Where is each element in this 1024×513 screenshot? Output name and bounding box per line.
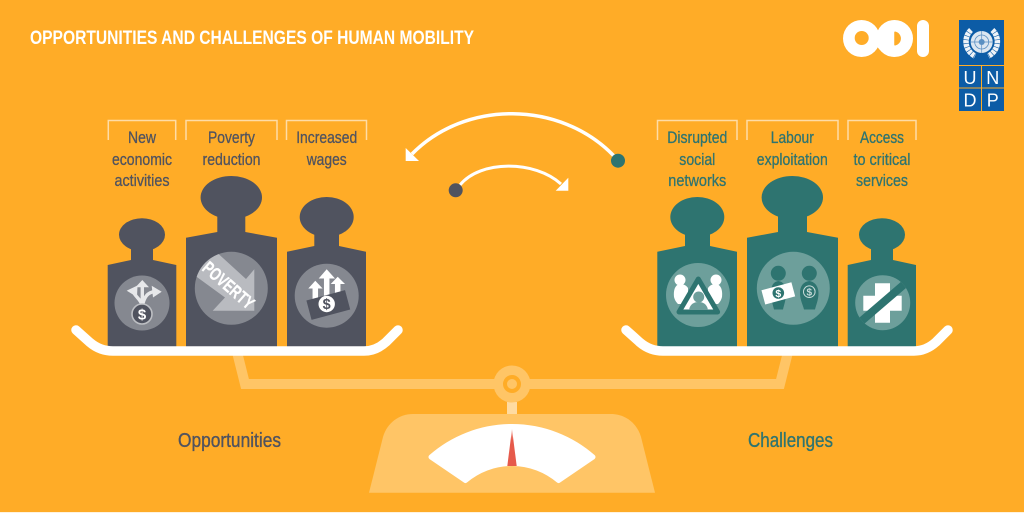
logo: UNDP: N [986, 68, 999, 88]
logo: UNDP: U [964, 68, 976, 88]
bracket and label: disrupted social networks: Disrupted [667, 128, 727, 147]
bracket and label: new economic activities: New [128, 128, 157, 147]
icon: diverging arrows and coin: $ [138, 306, 147, 324]
arrow: challenges to opportunities [406, 114, 625, 168]
bracket and label: new economic activities: activities [114, 171, 170, 190]
bracket and label: access to critical services: Access [860, 128, 904, 147]
pan: left [76, 330, 398, 351]
logo: ODI [843, 20, 929, 57]
icon: crossed-out medical cross [860, 282, 906, 324]
icon: rising arrows and banknote [306, 269, 350, 320]
bracket and label: increased wages: Increased [296, 128, 357, 147]
logo: UNDP [959, 20, 1004, 111]
bracket and label: access to critical services [848, 120, 916, 190]
needle [507, 429, 517, 466]
bracket and label: increased wages [286, 120, 366, 169]
weight: access to critical services [848, 218, 916, 347]
panel: challenges [626, 120, 948, 452]
title: OPPORTUNITIES AND CHALLENGES OF HUMAN MOBILITY [30, 27, 474, 49]
weight: labour exploitation [747, 176, 838, 347]
bracket and label: disrupted social networks: networks [668, 171, 726, 190]
bracket and label: disrupted social networks [658, 120, 737, 190]
icon: poverty down arrow: POVERTY [198, 258, 258, 313]
icon: poverty down arrow [196, 254, 256, 311]
weight: increased wages [287, 197, 366, 347]
gauge dial [431, 426, 593, 480]
icon: workers and banknote: $ [775, 288, 781, 300]
bracket and label: new economic activities [108, 120, 176, 190]
icon: people and warning triangle [674, 274, 722, 312]
label: challenges: Challenges [748, 430, 833, 452]
bracket and label: labour exploitation [747, 120, 838, 169]
logo: UNDP: D [964, 90, 976, 110]
bracket and label: disrupted social networks: social [679, 150, 715, 169]
bracket and label: poverty reduction: Poverty [208, 128, 255, 147]
bracket and label: new economic activities: economic [112, 150, 172, 169]
scale base and beam [237, 352, 788, 493]
bracket and label: labour exploitation: Labour [771, 128, 814, 147]
logo: UNDP: P [987, 90, 999, 110]
label: opportunities: Opportunities [178, 430, 281, 452]
icon: workers and banknote: $ [807, 288, 813, 298]
arrow: opportunities to challenges [449, 166, 568, 197]
bracket and label: access to critical services: services [856, 171, 908, 190]
icon: UN emblem [966, 30, 997, 56]
bracket and label: poverty reduction [186, 120, 277, 169]
icon: rising arrows and banknote: $ [323, 297, 331, 313]
bracket and label: poverty reduction: reduction [202, 150, 260, 169]
weight: disrupted social networks [657, 197, 737, 347]
pan: right [626, 330, 948, 351]
icon: workers and banknote [761, 266, 818, 310]
bracket and label: increased wages: wages [306, 150, 347, 169]
weight: poverty reduction [186, 176, 277, 347]
bracket and label: access to critical services: to critical [854, 150, 910, 169]
panel: opportunities [76, 120, 398, 452]
weight: new economic activities [108, 218, 176, 347]
bracket and label: labour exploitation: exploitation [757, 150, 828, 169]
